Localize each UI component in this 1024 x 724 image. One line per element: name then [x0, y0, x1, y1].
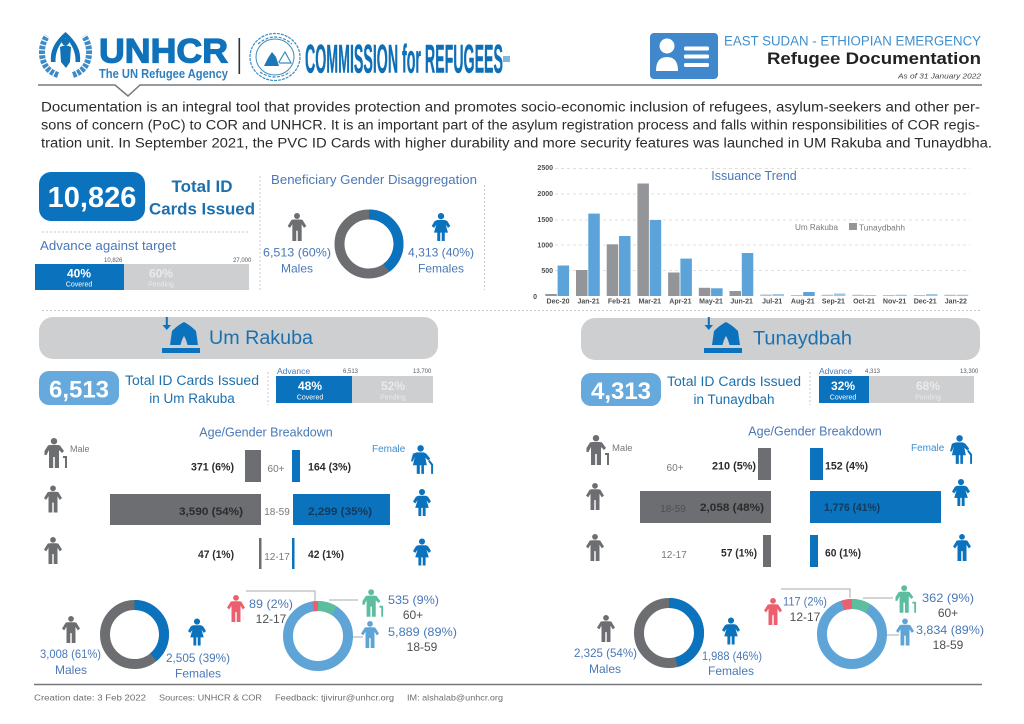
label 12-17: 117 (2%) — [783, 594, 827, 608]
row 12-17: 12-17 — [661, 550, 687, 561]
label 18-59: 18-59 — [407, 640, 438, 654]
logo: Commission for Refugees — [305, 38, 510, 82]
advance against target: Covered — [66, 282, 92, 288]
footer: Feedback: tjivirur@unhcr.org — [275, 692, 394, 702]
icon: elderly male — [44, 438, 67, 468]
males label: 2,325 (54%) — [574, 646, 637, 660]
total label: Total ID — [171, 177, 233, 196]
label 60+: 535 (9%) — [388, 593, 439, 607]
x axis labels: Feb-21 — [608, 298, 631, 306]
x axis labels: Mar-21 — [639, 298, 661, 306]
title block: Refugee Documentation — [767, 49, 981, 68]
icon: elderly — [362, 589, 383, 617]
legend: Um Rakuba — [795, 223, 839, 232]
age/gender breakdown: Male — [612, 443, 633, 454]
age/gender breakdown: Age/Gender Breakdown — [199, 426, 333, 440]
icon: male — [288, 213, 306, 241]
total badge — [39, 371, 119, 405]
row 18-59: 2,058 (48%) — [700, 502, 764, 514]
series: Tunaydbah — [545, 184, 956, 296]
title block — [724, 34, 982, 80]
advance bar: Pending — [380, 394, 406, 402]
header — [38, 32, 982, 96]
age donut group — [227, 589, 457, 666]
x axis labels: Jun-21 — [730, 298, 753, 306]
chart title: Issuance Trend — [711, 169, 797, 183]
total label: Total ID Cards Issued — [125, 373, 259, 388]
icon: youth — [764, 598, 782, 625]
advance bar: 6,513 — [343, 369, 359, 375]
females label — [408, 246, 474, 276]
icon: youth male — [586, 534, 604, 561]
females label: 1,988 (46%) — [702, 649, 762, 663]
donut: age — [288, 606, 348, 666]
x axis labels: Jul-21 — [762, 298, 782, 306]
icon: female — [188, 618, 206, 646]
females label: 2,505 (39%) — [166, 651, 230, 665]
panel: Tunaydbah — [574, 317, 984, 678]
donut: age — [822, 604, 882, 664]
label 18-59 — [388, 625, 457, 654]
x axis labels: Nov-21 — [883, 298, 906, 306]
advance bar: Pending — [915, 394, 941, 402]
females label: Females — [708, 664, 754, 678]
age/gender breakdown: Male — [70, 444, 90, 454]
gender donut group — [574, 603, 762, 678]
intro text: Documentation is an integral tool that provides protection and promotes socio-economic inclusion of refugees, asylum-seekers and other per- — [41, 100, 980, 114]
total badge: 4,313 — [591, 378, 651, 405]
row 18-59: 2,299 (35%) — [308, 506, 372, 518]
icon: youth male — [44, 537, 62, 564]
logo: UNHCR wordmark: The UN Refugee Agency — [99, 67, 228, 81]
row 60+: 164 (3%) — [308, 462, 351, 474]
title block: As of 31 January 2022 — [897, 72, 982, 80]
icon: elderly — [895, 585, 916, 613]
icon: adult male — [44, 486, 62, 512]
panel: beneficiary gender — [263, 173, 477, 276]
icon: elderly female — [411, 445, 433, 474]
donut: gender — [340, 214, 398, 274]
females label — [166, 651, 230, 680]
label 12-17: 12-17 — [256, 612, 287, 626]
icon: male — [62, 616, 80, 643]
row 60+ — [667, 448, 868, 480]
icon: youth female — [413, 538, 431, 566]
x axis labels: Sep-21 — [822, 298, 845, 306]
x axis labels: Dec-20 — [547, 298, 570, 306]
row 12-17: 60 (1%) — [825, 548, 861, 560]
males label: 3,008 (61%) — [40, 647, 101, 661]
males label — [574, 646, 637, 676]
advance bar: Advance — [277, 366, 310, 376]
icon: ID card — [650, 33, 718, 79]
x axis labels: May-21 — [699, 298, 723, 306]
total badge — [581, 373, 661, 406]
males label: Males — [589, 662, 621, 676]
age/gender breakdown — [586, 424, 972, 567]
header: COMMISSION for REFUGEES — [305, 38, 503, 82]
section banner — [581, 317, 980, 360]
advance bar: Advance — [819, 366, 852, 376]
label 60+: 362 (9%) — [922, 591, 974, 605]
logo: UNHCR wordmark: UNHCR — [99, 32, 228, 70]
section banner: Um Rakuba — [209, 328, 313, 349]
icon: female — [722, 618, 740, 644]
total label — [125, 373, 259, 406]
x axis labels: Apr-21 — [669, 298, 692, 306]
row 12-17: 42 (1%) — [308, 549, 344, 561]
row 12-17 — [198, 538, 344, 569]
row 12-17 — [661, 535, 861, 567]
row 18-59 — [640, 491, 941, 523]
total label: Cards Issued — [149, 200, 255, 218]
x axis labels: Aug-21 — [791, 298, 815, 306]
gender donut group — [40, 605, 230, 680]
x axis labels: Oct-21 — [853, 298, 875, 306]
advance bar — [276, 366, 433, 403]
icon: elderly male — [586, 435, 609, 465]
advance bar: 52% — [381, 379, 405, 393]
icon: male — [597, 615, 615, 642]
row 18-59 — [110, 494, 390, 525]
age donut group — [764, 585, 984, 664]
advance bar: 13,700 — [413, 369, 432, 375]
label 12-17: 12-17 — [790, 610, 821, 624]
icon: UNHCR emblem — [42, 32, 89, 75]
bar chart: issuance trend — [533, 165, 970, 306]
row 60+: 152 (4%) — [825, 460, 868, 472]
section banner — [39, 317, 438, 359]
total badge — [39, 172, 145, 221]
intro text: sons of concern (PoC) to COR and UNHCR. It is an important part of the asylum registration process and falls within responsibilities of COR regis- — [41, 118, 980, 132]
bar chart: issuance trend: 0 — [533, 294, 537, 301]
icon: adult female — [952, 479, 970, 506]
row 12-17: 12-17 — [264, 552, 290, 563]
total badge: 10,826 — [48, 182, 136, 214]
row 60+: 371 (6%) — [191, 462, 234, 474]
label 12-17 — [249, 597, 293, 626]
row 18-59: 18-59 — [660, 504, 686, 515]
panel: total ID cards — [35, 172, 255, 290]
label 60+: 60+ — [938, 606, 958, 620]
x axis labels — [547, 298, 967, 306]
label 12-17: 89 (2%) — [249, 597, 293, 611]
row 60+: 60+ — [667, 463, 684, 474]
males label: Males — [281, 262, 313, 276]
total label: Total ID Cards Issued — [667, 374, 801, 389]
panel: beneficiary gender: Beneficiary Gender Disaggregation — [271, 173, 477, 187]
intro text — [41, 100, 992, 150]
legend — [795, 223, 905, 232]
icon: COR emblem — [250, 34, 300, 80]
label 18-59: 18-59 — [933, 638, 964, 652]
icon: elderly female — [950, 435, 972, 464]
icon: female — [432, 213, 450, 241]
label 60+ — [922, 591, 974, 620]
icon: youth — [227, 595, 245, 622]
row 60+ — [191, 450, 351, 482]
total badge: 6,513 — [49, 376, 109, 404]
advance against target: 40% — [67, 266, 91, 280]
advance against target: 27,000 — [233, 258, 252, 264]
section banner: Tunaydbah — [753, 328, 852, 350]
males label — [263, 246, 331, 276]
age/gender breakdown — [44, 426, 433, 569]
advance bar: 13,300 — [960, 369, 979, 375]
series: Um Rakuba — [558, 214, 968, 296]
label 12-17 — [783, 594, 827, 624]
females label — [702, 649, 762, 678]
bar chart: issuance trend: 2000 — [537, 191, 553, 198]
row 60+: 60+ — [268, 464, 285, 475]
age/gender breakdown: Age/Gender Breakdown — [748, 424, 882, 438]
intro text: tration unit. In September 2021, the PVC ID Cards with higher durability and more security features was launched in UM Rakuba and Tunaydbha. — [41, 136, 992, 150]
bar chart: issuance trend: 2500 — [537, 165, 553, 172]
donut: gender — [105, 605, 164, 664]
x axis labels: Jan-21 — [578, 298, 600, 306]
x axis labels: Jan-22 — [945, 298, 967, 306]
total label: in Tunaydbah — [693, 392, 775, 407]
label 18-59: 5,889 (89%) — [388, 625, 457, 639]
label 18-59 — [916, 623, 984, 652]
footer: Creation date: 3 Feb 2022 — [34, 692, 146, 702]
row 18-59: 18-59 — [264, 507, 290, 518]
advance against target: Pending — [148, 282, 174, 288]
row 18-59: 1,776 (41%) — [824, 502, 880, 514]
females label: Females — [418, 262, 464, 276]
icon: adult — [896, 618, 914, 646]
label 18-59: 3,834 (89%) — [916, 623, 984, 637]
females label: 4,313 (40%) — [408, 246, 474, 260]
panel: Um Rakuba — [39, 317, 457, 680]
x axis labels: Dec-21 — [914, 298, 937, 306]
icon: adult female — [413, 489, 431, 516]
footer: Sources: UNHCR & COR — [159, 692, 262, 702]
advance against target — [35, 239, 252, 290]
advance against target: Advance against target — [40, 239, 177, 253]
males label — [40, 647, 101, 677]
advance bar: 48% — [298, 379, 322, 393]
bar chart: issuance trend: 1500 — [537, 217, 553, 224]
females label: Females — [175, 666, 221, 680]
footer — [34, 692, 503, 702]
age/gender breakdown: Female — [372, 444, 406, 455]
icon: adult male — [586, 483, 604, 510]
legend: Tunaydbahh — [859, 224, 905, 232]
total label — [667, 374, 801, 407]
males label: 6,513 (60%) — [263, 246, 331, 260]
advance against target: 10,826 — [104, 258, 123, 264]
icon: youth female — [953, 534, 971, 561]
icon: adult — [361, 621, 379, 648]
advance bar: 68% — [916, 379, 940, 393]
label 60+ — [388, 593, 439, 622]
donut: gender — [639, 603, 699, 663]
total label — [149, 177, 255, 218]
age/gender breakdown: Female — [911, 443, 945, 454]
advance bar: Covered — [830, 394, 856, 402]
males label: Males — [55, 663, 87, 677]
title block: EAST SUDAN - ETHIOPIAN EMERGENCY — [724, 34, 981, 48]
bar chart: issuance trend: 1000 — [537, 242, 553, 250]
bar chart: issuance trend: 500 — [541, 268, 553, 275]
advance bar: Covered — [297, 394, 323, 402]
advance bar: 32% — [831, 379, 855, 393]
footer: IM: alshalab@unhcr.org — [407, 692, 503, 702]
total label: in Um Rakuba — [149, 391, 235, 406]
row 12-17: 47 (1%) — [198, 549, 234, 561]
label 60+: 60+ — [403, 608, 423, 622]
row 12-17: 57 (1%) — [721, 548, 757, 560]
advance bar — [819, 366, 979, 403]
advance against target: 60% — [149, 266, 173, 280]
row 18-59: 3,590 (54%) — [179, 506, 243, 518]
advance bar: 4,313 — [865, 369, 881, 375]
row 60+: 210 (5%) — [712, 460, 756, 472]
